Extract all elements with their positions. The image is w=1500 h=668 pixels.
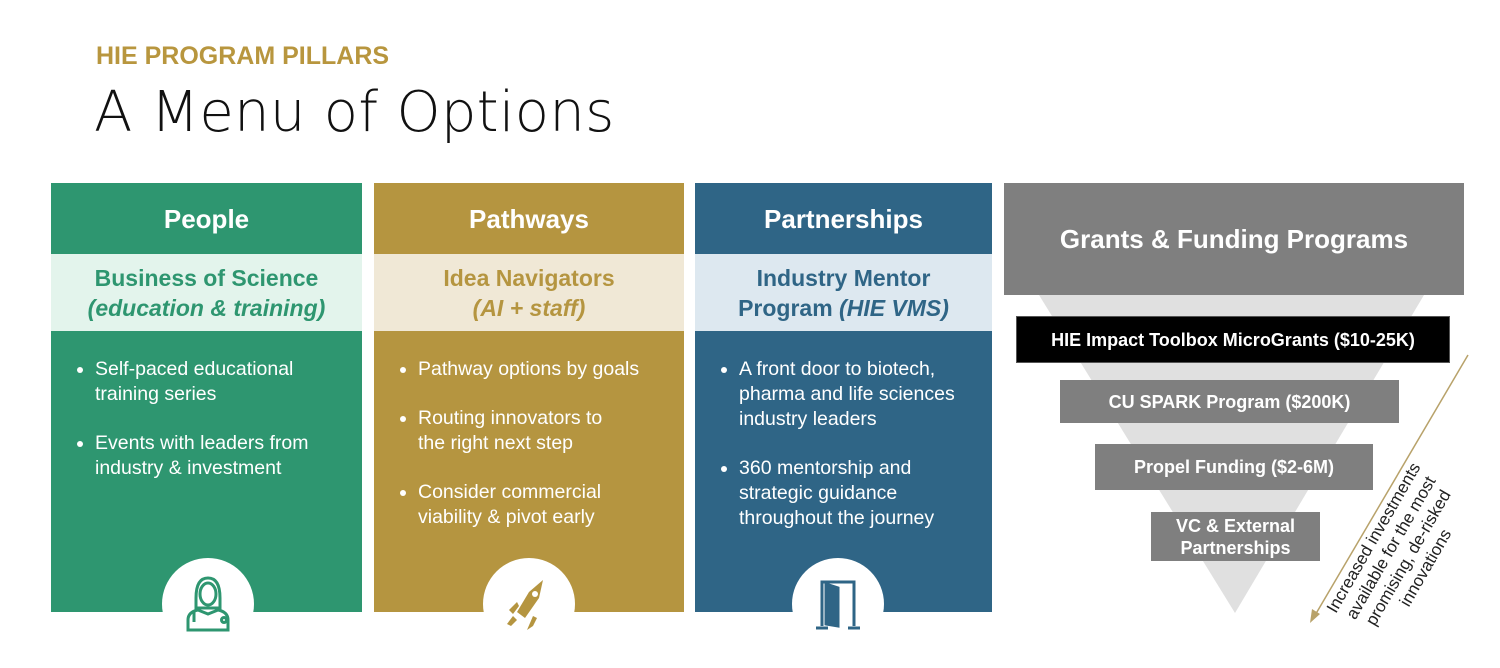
bar: spark: CU SPARK Program ($200K) bbox=[1109, 392, 1350, 412]
panel: partnerships: 360 mentorship and bbox=[739, 457, 911, 479]
header bbox=[1004, 183, 1464, 295]
bar: vc: VC & External Partnerships bbox=[1176, 516, 1295, 558]
panel: partnerships: Program (HIE VMS) bbox=[738, 294, 949, 320]
icon: rocket bbox=[483, 558, 575, 650]
panel: people: People bbox=[164, 204, 249, 234]
bar: vc bbox=[1151, 512, 1320, 561]
panel: pathways: Pathway options by goals bbox=[418, 358, 639, 380]
bar: microgrants bbox=[1016, 316, 1450, 363]
panel: partnerships: Partnerships bbox=[764, 204, 923, 234]
kicker: HIE PROGRAM PILLARS bbox=[96, 42, 389, 70]
icon: door bbox=[792, 558, 884, 650]
panel: partnerships: strategic guidance bbox=[739, 482, 897, 504]
header: Grants & Funding Programs bbox=[1060, 224, 1408, 254]
panel: pathways: Idea Navigators bbox=[443, 264, 615, 290]
panel: grants funnel bbox=[1004, 183, 1469, 629]
arrow label: Increased investments available for the most promising, de-risked innovations bbox=[1323, 459, 1455, 629]
panel: pathways: Consider commercial bbox=[418, 481, 601, 503]
bar: propel bbox=[1095, 444, 1373, 490]
panel: people: Self-paced educational bbox=[95, 358, 293, 380]
panel: pathways: the right next step bbox=[418, 432, 573, 454]
panel: people: Events with leaders from bbox=[95, 432, 309, 454]
panel: partnerships: industry leaders bbox=[739, 408, 877, 430]
panel: people bbox=[51, 183, 362, 612]
funnel triangle bbox=[1039, 295, 1469, 623]
bar: microgrants: HIE Impact Toolbox MicroGrants ($10-25K) bbox=[1051, 330, 1415, 350]
panel: pathways bbox=[374, 183, 684, 612]
panel: partnerships bbox=[695, 183, 992, 612]
panel: people: Business of Science bbox=[95, 264, 318, 290]
panel: people: industry & investment bbox=[95, 457, 281, 479]
panel: partnerships: pharma and life sciences bbox=[739, 383, 955, 405]
title: A Menu of Options bbox=[94, 80, 615, 145]
bar: propel: Propel Funding ($2-6M) bbox=[1134, 457, 1334, 477]
icon: doctor bbox=[162, 558, 254, 650]
panel: partnerships: A front door to biotech, bbox=[739, 358, 935, 380]
bar: spark bbox=[1060, 380, 1399, 423]
panel: pathways: (AI + staff) bbox=[473, 294, 585, 320]
panel: partnerships: Industry Mentor bbox=[757, 264, 930, 290]
panel: pathways: Routing innovators to bbox=[418, 407, 602, 429]
panel: pathways: viability & pivot early bbox=[418, 506, 595, 528]
panel: people: (education & training) bbox=[88, 294, 325, 320]
panel: people: training series bbox=[95, 383, 216, 405]
panel: partnerships: throughout the journey bbox=[739, 507, 934, 529]
panel: pathways: Pathways bbox=[469, 204, 589, 234]
